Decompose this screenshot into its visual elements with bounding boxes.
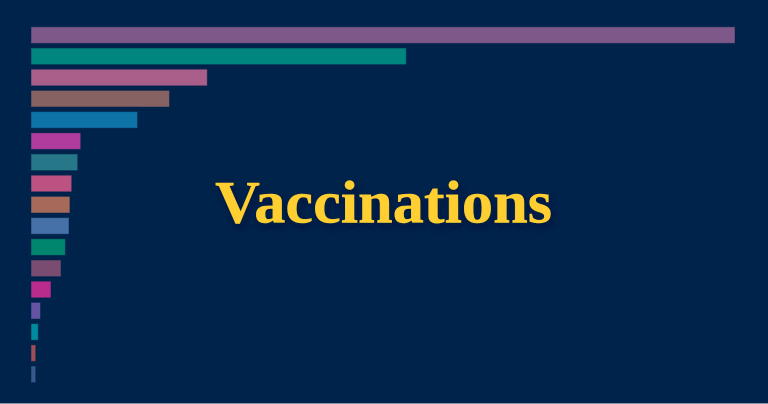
title: Vaccinations: [215, 170, 552, 236]
bar 11: [31, 239, 65, 255]
bar 4: [31, 90, 170, 107]
bar 3: [31, 69, 207, 86]
bar 8: [31, 175, 72, 192]
bottom edge line: [0, 403, 768, 404]
bar 17: [31, 366, 36, 383]
bar 13: [31, 281, 51, 298]
bar 15: [31, 324, 38, 340]
bar 7: [31, 154, 78, 171]
bar 16: [31, 345, 36, 361]
bar 12: [31, 260, 61, 277]
bar 2: [31, 48, 406, 65]
bar 14: [31, 302, 40, 319]
bar 10: [31, 218, 69, 234]
bar 5: [31, 112, 138, 128]
bar 9: [31, 196, 70, 213]
bar 1: [31, 27, 735, 43]
bar 6: [31, 133, 81, 149]
